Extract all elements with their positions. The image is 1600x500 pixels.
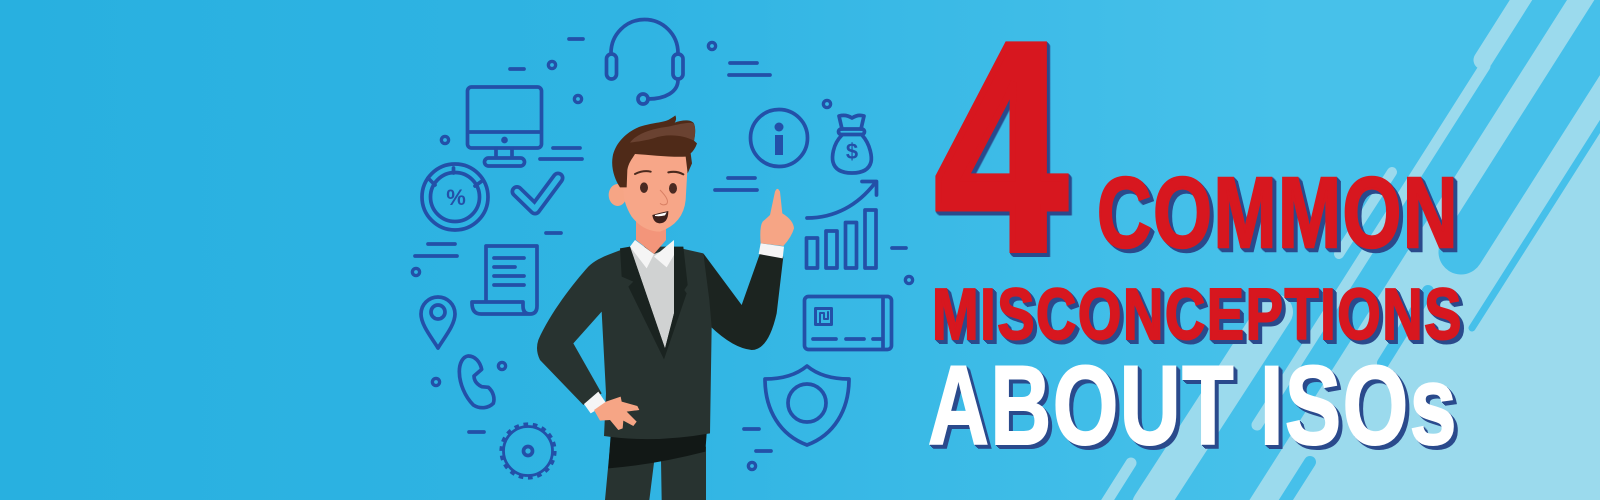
icon: location pin — [421, 297, 455, 348]
hair highlight — [630, 123, 695, 143]
icon: gear — [501, 424, 555, 478]
icon: money bag — [833, 115, 871, 173]
background diagonal stripes — [1095, 0, 1600, 500]
hair — [612, 115, 697, 187]
eyebrows — [635, 171, 683, 174]
lapels — [620, 247, 688, 359]
face — [623, 153, 688, 232]
small rings — [412, 42, 913, 470]
icon: shield — [765, 366, 849, 445]
left cuff — [584, 392, 607, 413]
icon cloud — [412, 20, 913, 478]
eyes — [640, 182, 677, 194]
icon: document scroll — [472, 246, 537, 314]
title — [928, 0, 1463, 468]
icon: phone — [459, 356, 494, 408]
businessman character — [537, 115, 794, 500]
icon: monitor — [468, 87, 542, 166]
hand on hip — [594, 397, 639, 430]
shirt — [630, 247, 674, 348]
MISCONCEPTIONS: MISCONCEPTIONS — [932, 275, 1463, 355]
icon: percent donut — [422, 164, 488, 230]
ear — [609, 184, 627, 206]
right cuff — [759, 243, 784, 258]
icon: credit card — [804, 296, 892, 350]
collar — [630, 240, 674, 268]
right arm raised — [703, 253, 783, 350]
waist shadow — [608, 433, 707, 468]
icon: check mark — [517, 178, 558, 209]
icon: growth arrow and bars — [806, 182, 876, 268]
trousers — [605, 447, 706, 500]
icon: percent donut: % — [446, 185, 466, 210]
icon: headset — [606, 20, 683, 104]
icon: info — [750, 110, 808, 166]
nose — [660, 190, 667, 205]
mouth — [652, 211, 668, 223]
COMMON: COMMON — [1097, 157, 1459, 269]
icon: money bag: $ — [846, 139, 858, 164]
small dashes — [415, 39, 906, 451]
jacket — [537, 247, 712, 439]
teeth — [655, 212, 667, 216]
neck — [636, 222, 666, 254]
raised hand — [760, 189, 794, 246]
